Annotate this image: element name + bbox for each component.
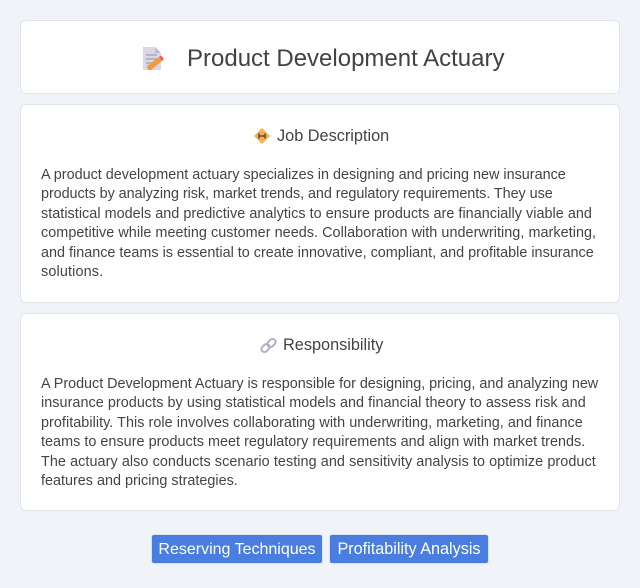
- icon: document with pencil: [143, 47, 164, 70]
- tag: reserving techniques: [151, 534, 323, 564]
- tag: profitability analysis: [329, 534, 489, 564]
- text block: job description: [41, 167, 596, 280]
- icon: orange diamond: [254, 128, 270, 144]
- icon: chain link: [260, 338, 276, 353]
- text block: job description: products by analyzing risk, market trends, and regulatory requirements. They use: [41, 186, 553, 202]
- tag: reserving techniques: Reserving Techniques: [158, 541, 316, 558]
- text block: job description: A product development actuary specializes in designing and pricing new insurance: [41, 167, 566, 183]
- text block: responsibility: profitability. This role involves collaborating with underwriting, marketing, and finance: [41, 415, 583, 431]
- panel: job description: [20, 104, 620, 303]
- text block: job description: competitive while meeting customer needs. Collaboration with underwriting, marketing,: [41, 225, 596, 241]
- heading: responsibility: Responsibility: [283, 336, 383, 354]
- text block: responsibility: The actuary also conducts scenario testing and sensitivity analysis to optimize product: [41, 454, 596, 470]
- panel: title card: [20, 20, 620, 94]
- text block: job description: statistical models and predictive analytics to ensure products are financially viable and: [41, 206, 592, 222]
- panel: responsibility: [20, 313, 620, 511]
- text block: responsibility: teams to ensure products meet regulatory requirements and align with market trends.: [41, 434, 585, 450]
- title: Product Development Actuary: [187, 45, 504, 72]
- tag: profitability analysis: Profitability Analysis: [337, 540, 481, 558]
- text block: responsibility: insurance products by using statistical models and financial theory to assess risk and: [41, 395, 586, 411]
- text block: job description: and finance teams is essential to create innovative, compliant, and profitable insurance: [41, 245, 594, 261]
- heading: job description: Job Description: [277, 127, 389, 145]
- text block: responsibility: A Product Development Actuary is responsible for designing, pricing, and analyzing new: [41, 376, 598, 392]
- text block: job description: solutions.: [41, 264, 103, 280]
- text block: responsibility: features and pricing strategies.: [41, 473, 238, 489]
